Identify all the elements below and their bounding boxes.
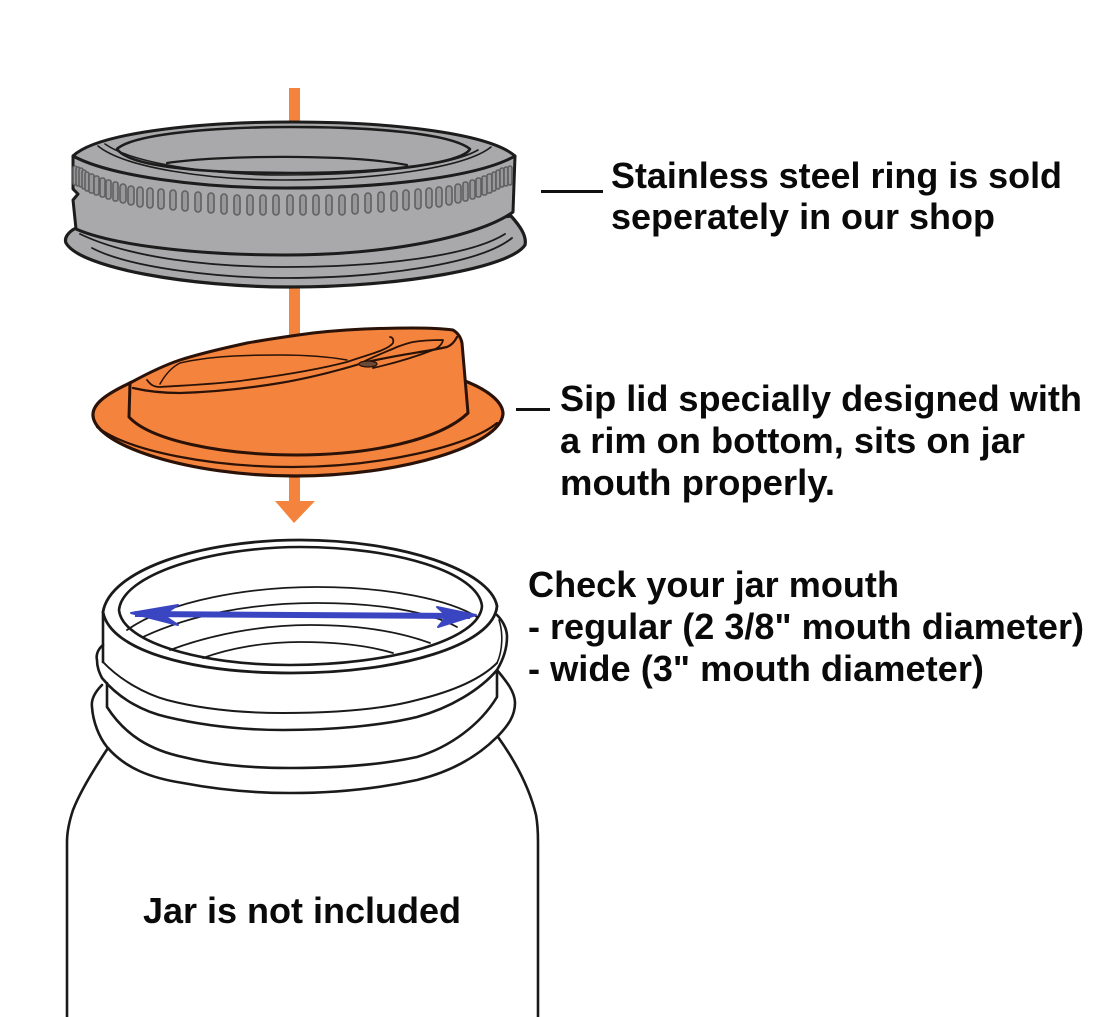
ring knurling <box>73 166 512 215</box>
leader line: lid <box>516 408 550 411</box>
callout: lid: mouth properly. <box>560 462 835 503</box>
ring body <box>73 122 515 255</box>
jar upper thread <box>97 615 507 730</box>
icon: glass jar outline <box>67 540 538 1017</box>
callout: jar mouth sizes <box>528 564 1084 689</box>
lid top details <box>133 337 457 393</box>
callout: jar mouth sizes: Check your jar mouth <box>528 564 899 605</box>
icon: orange sip lid <box>93 328 503 476</box>
lid raised body <box>129 328 468 455</box>
callout: jar mouth sizes: - wide (3" mouth diameter) <box>528 648 984 689</box>
callout: lid <box>560 378 1082 503</box>
ring bottom lip <box>65 216 525 287</box>
jar inner threads <box>127 587 477 630</box>
callout: ring <box>611 155 1062 237</box>
callout: ring: Stainless steel ring is sold <box>611 155 1062 196</box>
ring opening <box>117 127 470 173</box>
jar mouth rim <box>103 540 497 673</box>
jar lower neck bead <box>92 670 515 793</box>
callout: ring: seperately in our shop <box>611 196 995 237</box>
arrow: assembly direction <box>275 88 315 523</box>
arrow: mouth diameter <box>131 605 476 627</box>
note: jar not included: Jar is not included <box>143 890 461 931</box>
callout: lid: a rim on bottom, sits on jar <box>560 420 1025 461</box>
jar neck <box>107 670 497 768</box>
callout: lid: Sip lid specially designed with <box>560 378 1082 419</box>
jar shoulders and sides <box>67 748 108 1017</box>
icon: stainless steel ring <box>65 122 525 287</box>
callout: jar mouth sizes: - regular (2 3/8" mouth diameter) <box>528 606 1084 647</box>
lid brim <box>93 381 503 476</box>
leader line: ring <box>541 190 603 193</box>
